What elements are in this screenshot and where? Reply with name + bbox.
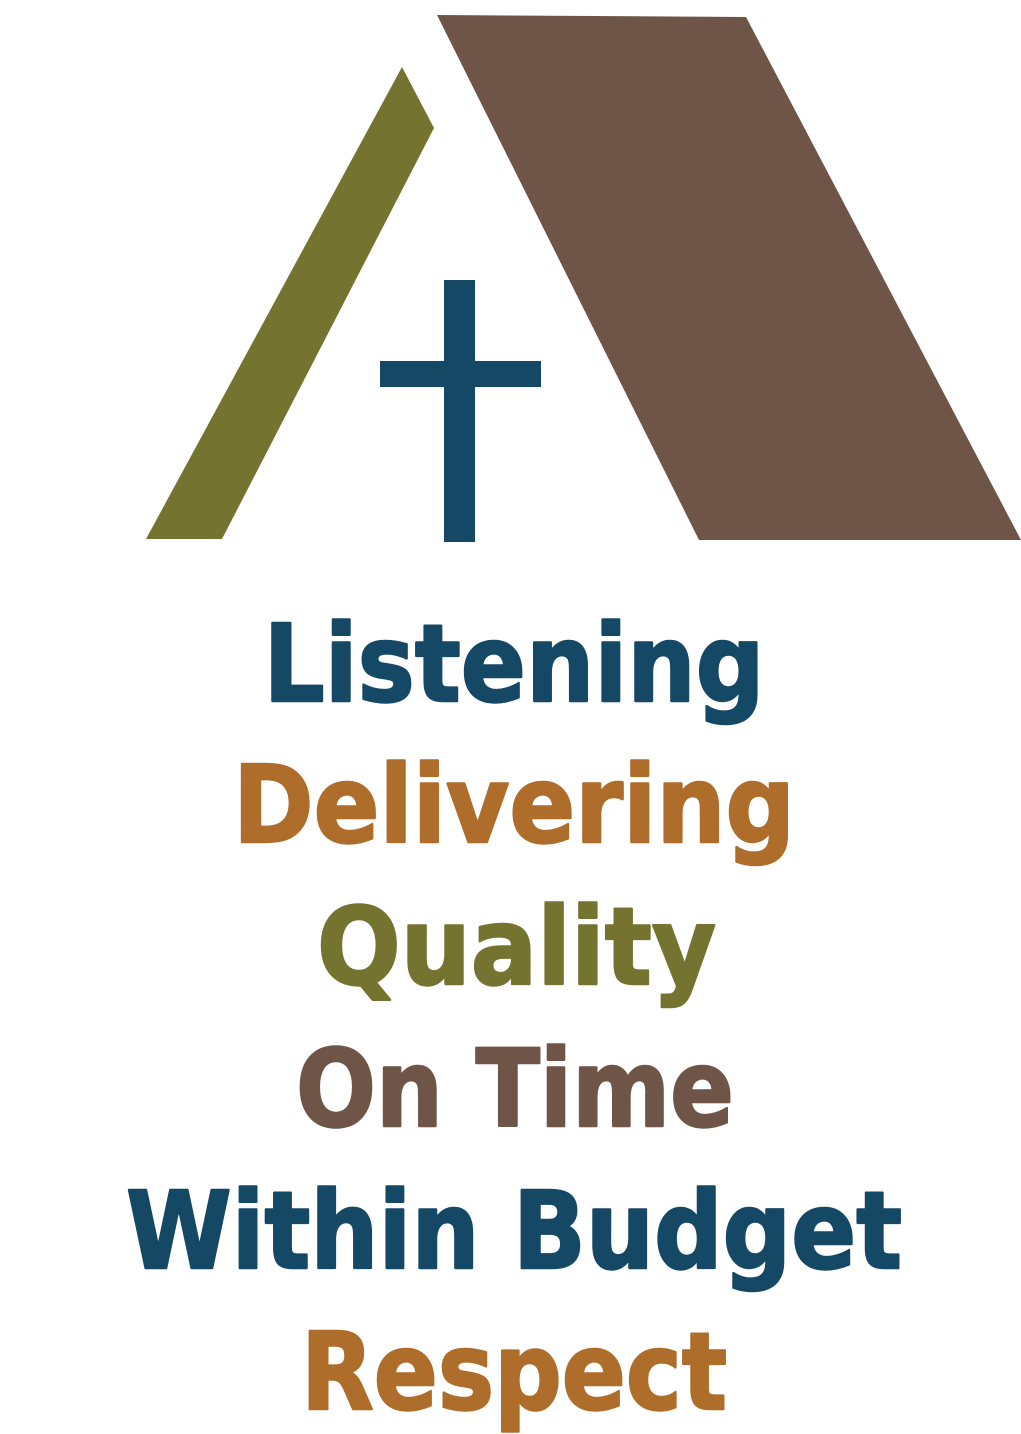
right roof brown [437,15,1021,540]
value: Listening: Listening [264,603,764,727]
value: Respect: Respect [301,1311,727,1434]
values list [126,603,902,1434]
value: Delivering: Delivering [233,744,795,868]
value: On Time: On Time [296,1028,734,1152]
value: Within Budget: Within Budget [126,1170,902,1294]
icon: church roof logo [146,15,1021,542]
value: Quality: Quality [317,886,716,1010]
icon: cross [380,280,541,542]
left roof olive [146,67,434,539]
